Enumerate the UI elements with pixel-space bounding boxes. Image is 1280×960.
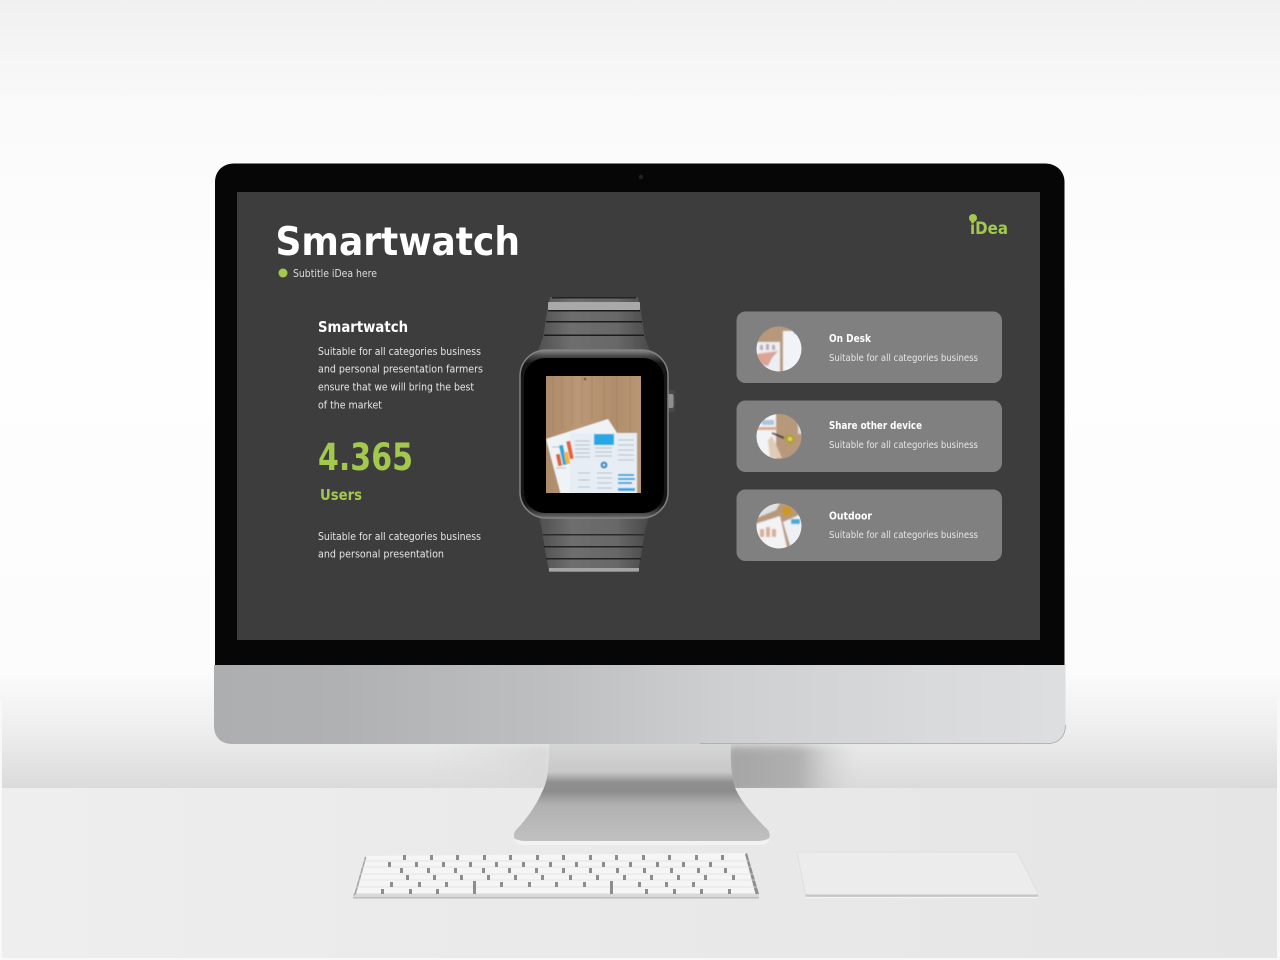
description paragraph bbox=[318, 345, 483, 412]
trackpad bbox=[797, 852, 1038, 898]
card background bbox=[736, 400, 1002, 472]
monitor chin bbox=[214, 665, 1066, 744]
desk surface bbox=[0, 788, 1280, 960]
card title: On Desk bbox=[829, 332, 872, 345]
monitor bezel bbox=[215, 164, 1064, 665]
card description: Suitable for all categories business bbox=[829, 440, 978, 451]
monitor shadow on wall bbox=[510, 744, 840, 788]
description paragraph: and personal presentation farmers bbox=[318, 362, 483, 376]
heading: Smartwatch: Smartwatch bbox=[318, 318, 408, 336]
watch band bottom bbox=[538, 512, 650, 572]
monitor stand bbox=[514, 744, 770, 845]
card title: Share other device bbox=[829, 419, 922, 432]
monitor bbox=[214, 164, 1066, 845]
description paragraph: ensure that we will bring the best bbox=[318, 380, 475, 394]
closing paragraph: and personal presentation bbox=[318, 548, 444, 560]
watch band top bbox=[536, 297, 652, 356]
thumbnail: on desk bbox=[756, 326, 802, 372]
watch case bbox=[520, 350, 668, 518]
slide title: Smartwatch bbox=[276, 220, 520, 265]
left text column bbox=[318, 318, 483, 560]
statistic label: Users: Users bbox=[320, 486, 362, 504]
card description: Suitable for all categories business bbox=[829, 530, 978, 541]
description paragraph: of the market bbox=[318, 398, 383, 412]
slide background bbox=[237, 192, 1040, 640]
slide screen bbox=[237, 192, 1040, 640]
feature card: On Desk bbox=[736, 312, 1002, 383]
closing paragraph: Suitable for all categories business bbox=[318, 530, 481, 543]
logo: iDea: iDea bbox=[970, 219, 1008, 238]
smartwatch illustration bbox=[520, 297, 675, 572]
statistic: 4.365: 4.365 bbox=[318, 436, 413, 479]
webcam bbox=[639, 175, 643, 179]
card background bbox=[736, 490, 1002, 561]
description paragraph: Suitable for all categories business bbox=[318, 345, 481, 358]
card title: Outdoor bbox=[829, 510, 872, 522]
thumbnail: share other device bbox=[756, 414, 802, 459]
card description: Suitable for all categories business bbox=[829, 353, 978, 364]
watch screen photo bbox=[544, 374, 643, 495]
subtitle with bullet: Subtitle iDea here bbox=[293, 267, 377, 280]
photo edge strips bbox=[0, 700, 1280, 960]
digital crown bbox=[664, 390, 675, 471]
feature card: Share other device bbox=[736, 400, 1002, 472]
keyboard bbox=[353, 853, 759, 898]
thumbnail: outdoor bbox=[756, 504, 802, 548]
card background bbox=[736, 312, 1002, 383]
closing paragraph bbox=[318, 530, 481, 560]
feature card: Outdoor bbox=[736, 490, 1002, 561]
